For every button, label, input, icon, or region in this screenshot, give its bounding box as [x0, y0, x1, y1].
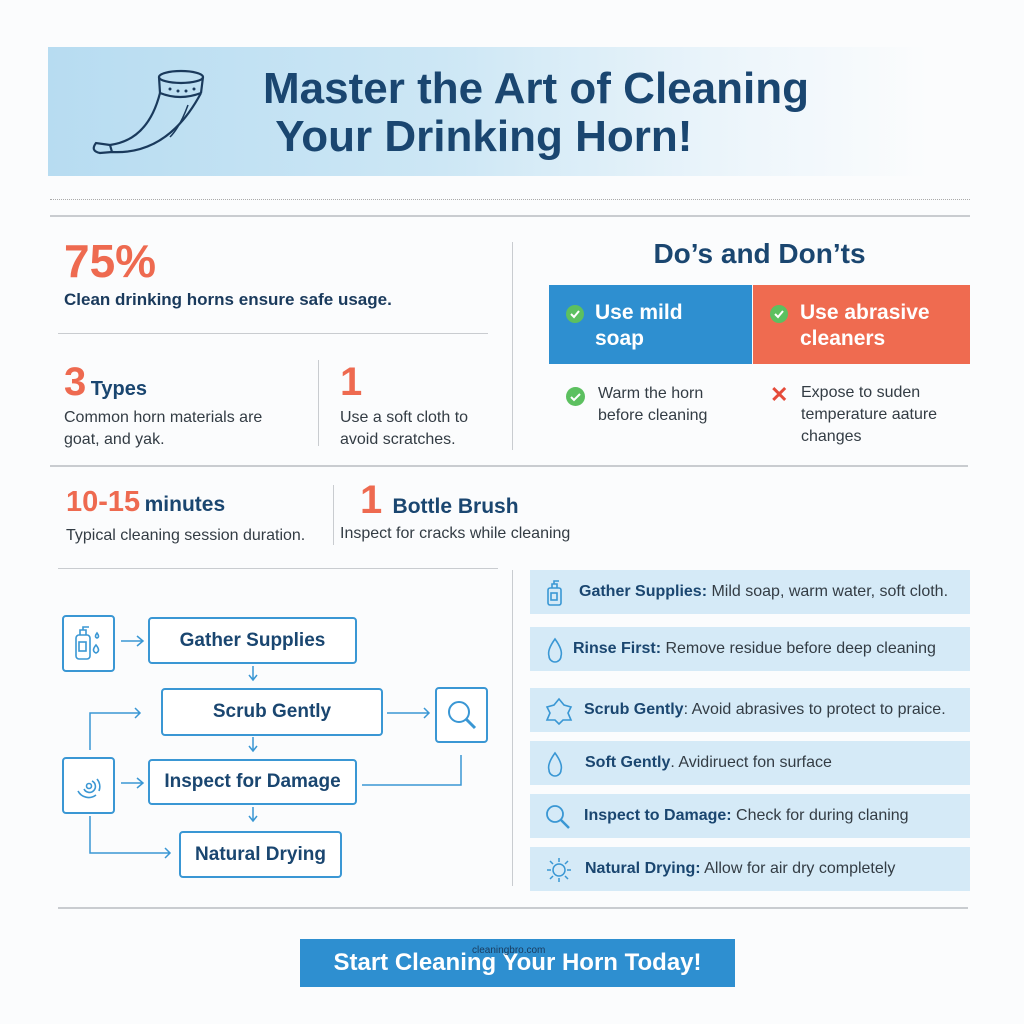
do: use mild soap [549, 285, 752, 364]
heading: do's and don'ts: Do’s and Don’ts [653, 238, 866, 269]
don't: abrasive cleaners: cleaners [800, 327, 885, 350]
step: soft gently [530, 741, 970, 785]
step: inspect to damage [530, 794, 970, 838]
text: Expose to suden temperature aature changes [801, 384, 937, 445]
step: soft gently: Soft Gently. Avidiruect fon surface [585, 754, 832, 771]
icon box: magnifier [435, 687, 488, 743]
title: Your Drinking Horn! [275, 112, 692, 161]
stat: 1 bottle brush: 1 Bottle Brush [360, 478, 519, 522]
step box: gather supplies [148, 617, 357, 664]
stat: 75%: Clean drinking horns ensure safe usage. [64, 290, 392, 309]
do: warm the horn [566, 385, 707, 424]
stat: 10-15 minutes [66, 486, 305, 544]
icon box: swirl [62, 757, 115, 814]
call to action button [300, 939, 735, 987]
step box: scrub gently: Scrub Gently [213, 701, 331, 722]
step: natural drying [530, 847, 970, 891]
stat: 75%: 75% [64, 235, 156, 287]
stat: 3 types: goat, and yak. [64, 431, 165, 448]
step: rinse first: Rinse First: Remove residue before deep cleaning [573, 640, 936, 657]
stat: 1 soft cloth: 1 [340, 360, 362, 404]
flowchart [62, 615, 488, 878]
stat: 10-15 minutes: 10-15 minutes [66, 486, 225, 518]
call to action button: Start Cleaning Your Horn Today! [333, 949, 702, 976]
stat: 1 bottle brush [340, 478, 570, 542]
step: scrub gently: Scrub Gently: Avoid abrasives to protect to praice. [584, 701, 946, 718]
step: natural drying: Natural Drying: Allow for air dry completely [585, 860, 895, 877]
step box: inspect for damage: Inspect for Damage [164, 771, 341, 792]
steps list [530, 570, 970, 891]
step box: natural drying [179, 831, 342, 878]
icon box: soap bottle [62, 615, 115, 672]
don't: sudden temperature [770, 382, 937, 445]
step: scrub gently [530, 688, 970, 732]
step: inspect to damage: Inspect to Damage: Check for during claning [584, 807, 909, 824]
header banner [48, 47, 928, 176]
don't: abrasive cleaners: Use abrasive [800, 301, 930, 324]
stat: 3 types: Common horn materials are [64, 409, 262, 426]
stat: 1 soft cloth [340, 360, 468, 448]
do: use mild soap: Use mild [595, 301, 683, 324]
step box: gather supplies: Gather Supplies [180, 630, 325, 650]
icon: drinking horn [92, 70, 204, 154]
title [263, 64, 809, 161]
stat: 1 bottle brush: Inspect for cracks while cleaning [340, 525, 570, 542]
stat: 3 types: 3 Types [64, 360, 147, 404]
step: gather supplies [530, 570, 970, 614]
text: Warm the horn before cleaning [598, 385, 707, 424]
step box: scrub gently [161, 688, 383, 736]
watermark: cleaningbro.com [472, 945, 545, 956]
stat: 10-15 minutes: Typical cleaning session duration. [66, 527, 305, 544]
stat: 1 soft cloth: Use a soft cloth to avoid scratches. [340, 409, 468, 448]
do: use mild soap: soap [595, 327, 644, 350]
step box: natural drying: Natural Drying [195, 844, 326, 864]
don't: abrasive cleaners [753, 285, 970, 364]
title: Master the Art of Cleaning [263, 64, 809, 113]
step box: inspect for damage [148, 759, 357, 805]
text: ✕ [770, 382, 788, 407]
stat: 3 types [64, 360, 262, 448]
stat: 75% [64, 235, 392, 309]
step: gather supplies: Gather Supplies: Mild soap, warm water, soft cloth. [579, 583, 948, 600]
step: rinse first [530, 627, 970, 671]
